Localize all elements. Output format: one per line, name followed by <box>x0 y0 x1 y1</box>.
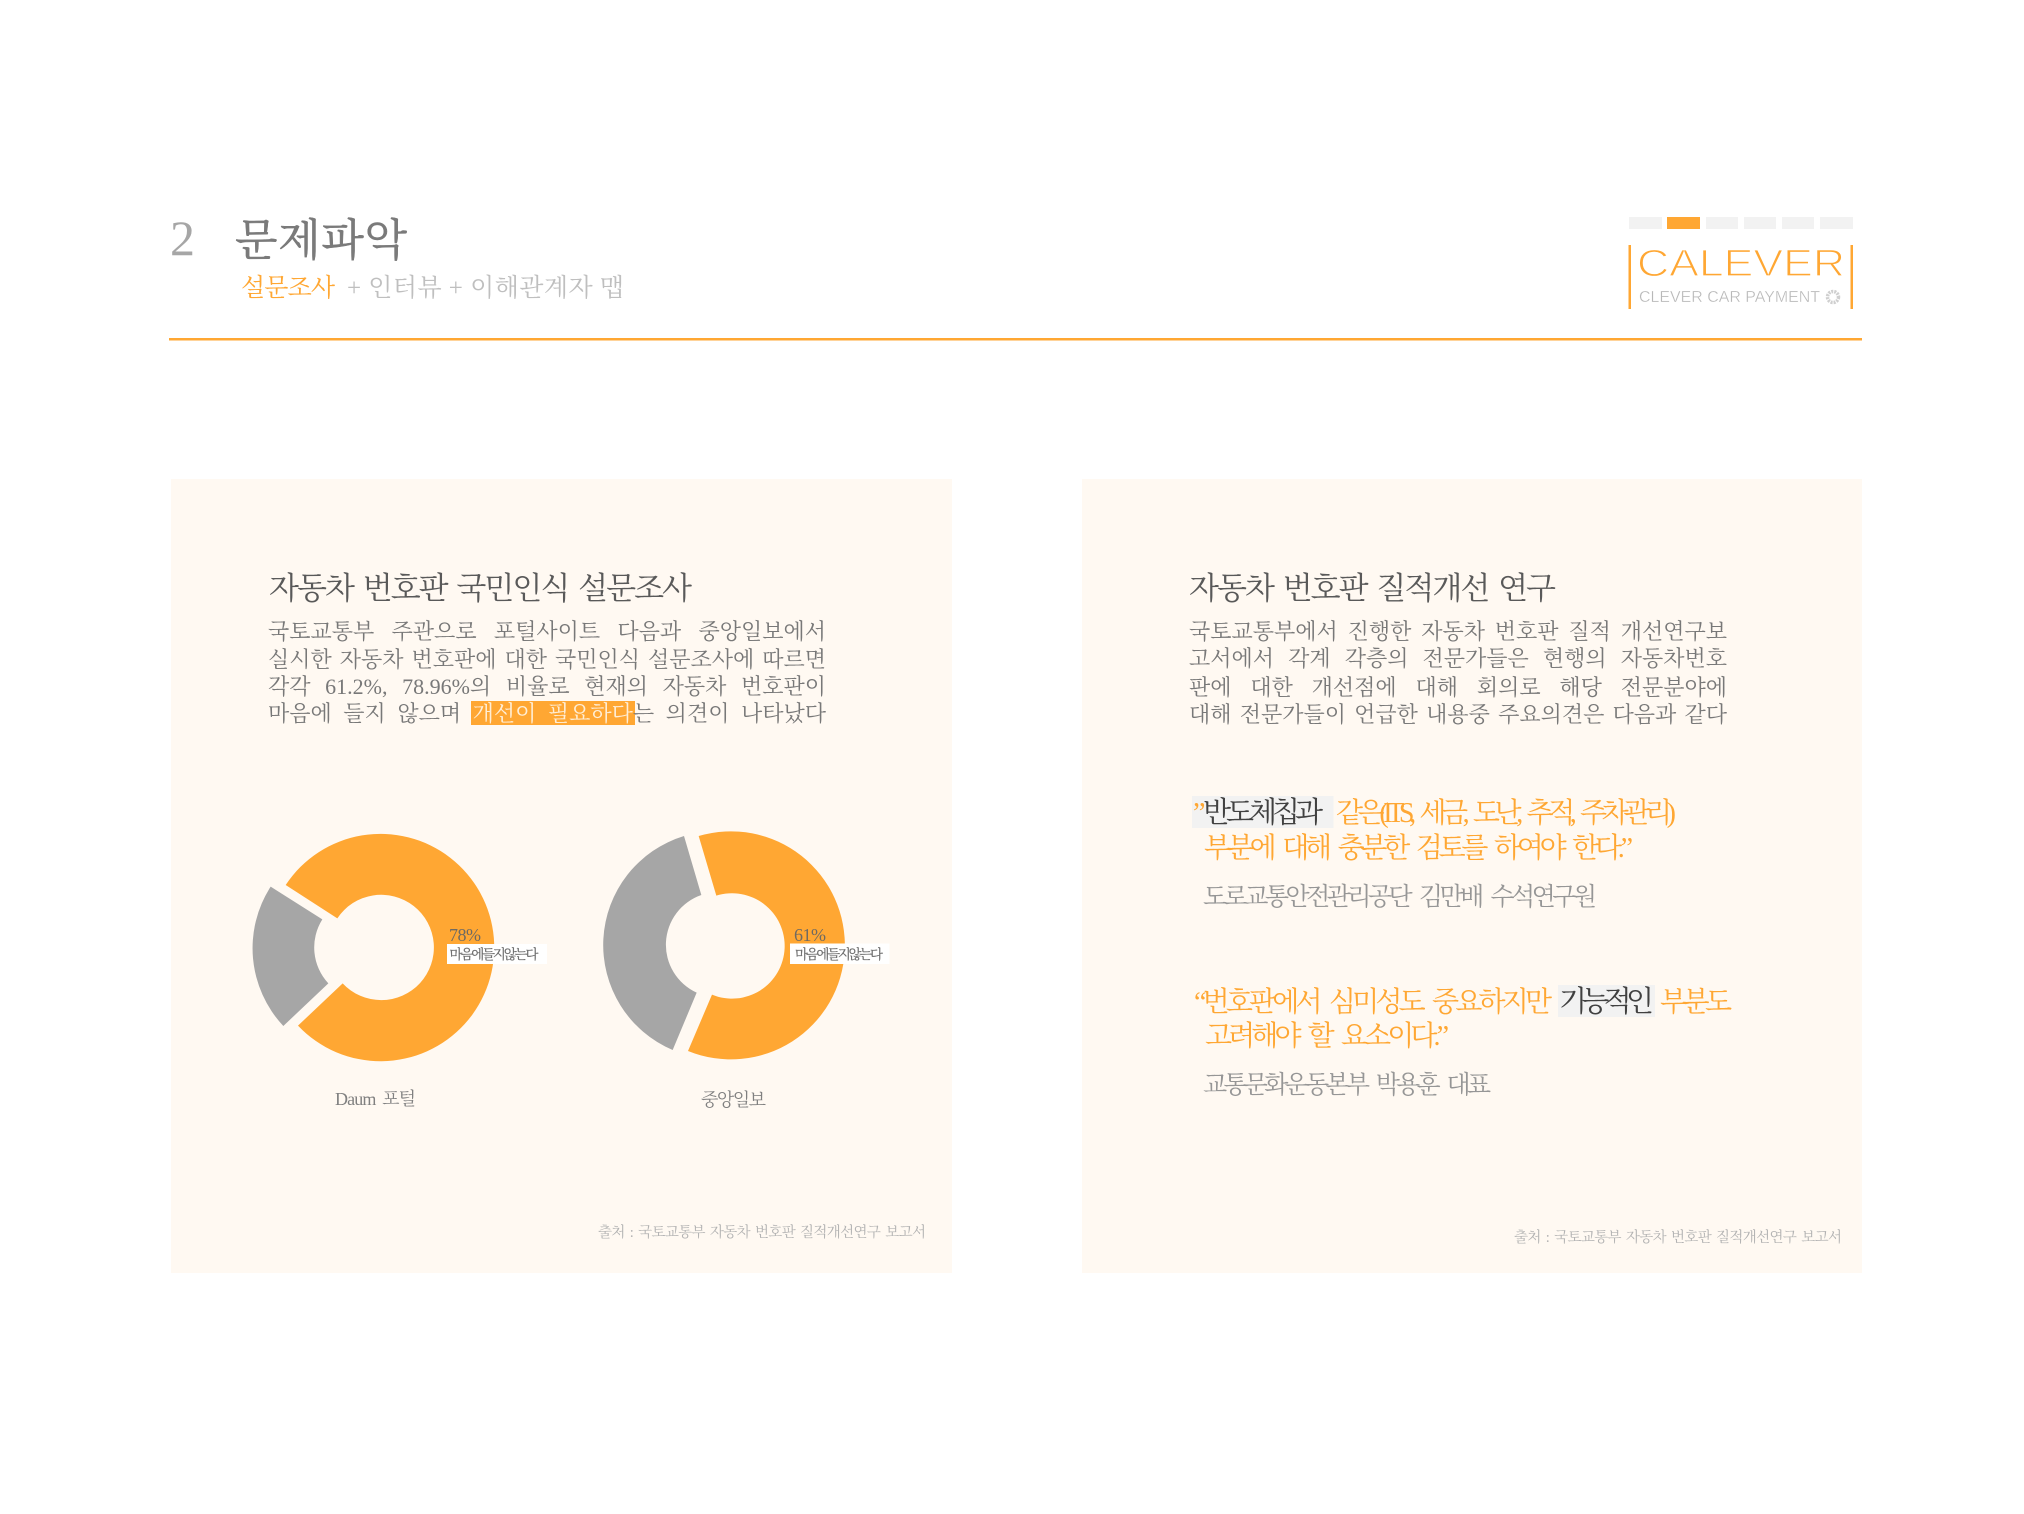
quote 1 attribution: 도로교통안전관리공단 김만배 수석연구원 <box>1203 883 1597 911</box>
label: dislike <box>790 944 890 964</box>
label: dislike: 마음에들지않는다 <box>795 946 883 962</box>
research body text: 국토교통부에서 진행한 자동차 번호판 질적 개선연구보 <box>1189 619 1727 644</box>
source note: 출처 : 국토교통부 자동차 번호판 질적개선연구 보고서 <box>598 1223 926 1241</box>
survey body text: 국토교통부 주관으로 포털사이트 다음과 중앙일보에서 <box>268 619 826 644</box>
value label 61%: 61% <box>794 925 826 945</box>
quote 1 <box>1192 796 1676 911</box>
quote 2 attribution: 교통문화운동본부 박용훈 대표 <box>1203 1071 1491 1099</box>
donut chart: Daum portal 78% <box>253 834 547 1109</box>
research body text: 고서에서 각계 각층의 전문가들은 현행의 자동차번호 <box>1189 646 1727 671</box>
quote 1: 반도체칩과 <box>1203 796 1323 829</box>
label: dislike <box>447 944 547 964</box>
research body text <box>1189 618 1727 730</box>
caption: Daum portal: Daum 포털 <box>335 1089 416 1109</box>
quote 2: 고려해야 할 요소이다.” <box>1205 1020 1449 1052</box>
quote 2: 부분도 <box>1660 986 1732 1018</box>
highlight: needs improvement <box>471 701 635 725</box>
subtitle <box>241 274 624 302</box>
panel: survey <box>171 479 952 1273</box>
value label 78%: 78% <box>449 925 481 945</box>
quote 1: ” <box>1193 798 1205 829</box>
header <box>169 210 1862 340</box>
survey body text: 각각 61.2%, 78.96%의 비율로 현재의 자동차 번호판이 <box>268 674 826 699</box>
subtitle: 설문조사 <box>241 274 336 302</box>
survey body text: 실시한 자동차 번호판에 대한 국민인식 설문조사에 따르면 <box>268 646 826 672</box>
title: 문제파악 <box>235 216 407 265</box>
logo: CALEVER: CLEVER CAR PAYMENT <box>1639 289 1821 306</box>
research body text: 대해 전문가들이 언급한 내용중 주요의견은 다음과 같다 <box>1189 702 1727 726</box>
donut chart: JoongAng Ilbo 61% <box>603 831 890 1110</box>
label: dislike: 마음에들지않는다 <box>450 946 538 962</box>
header rule <box>169 338 1862 340</box>
survey heading: 자동차 번호판 국민인식 설문조사 <box>269 571 692 606</box>
page progress bars <box>1629 217 1853 229</box>
quote 1: 부분에 대해 충분한 검토를 하여야 한다.” <box>1204 832 1633 864</box>
caption: JoongAng Ilbo: 중앙일보 <box>701 1090 766 1110</box>
survey body text: 마음에 들지 않으며 개선이 필요하다는 의견이 나타났다 <box>268 701 826 726</box>
quote 1: 같은(ITS, 세금, 도난, 추적, 주차관리) <box>1336 797 1676 829</box>
quote 2 <box>1194 985 1732 1099</box>
section number: 2 <box>170 210 195 266</box>
subtitle: + 인터뷰 + 이해관계자 맵 <box>347 274 624 302</box>
research body text: 판에 대한 개선점에 대해 회의로 해당 전문분야에 <box>1189 674 1727 700</box>
survey body text <box>268 618 826 730</box>
source note: 출처 : 국토교통부 자동차 번호판 질적개선연구 보고서 <box>1514 1228 1842 1246</box>
quote 2: 기능적인 <box>1559 985 1654 1018</box>
logo: CALEVER: CALEVER <box>1637 243 1845 285</box>
panel: research <box>1082 479 1862 1273</box>
quote 2: “번호판에서 심미성도 중요하지만 <box>1194 986 1552 1018</box>
research heading: 자동차 번호판 질적개선 연구 <box>1189 571 1556 606</box>
logo: CALEVER <box>1628 243 1853 309</box>
